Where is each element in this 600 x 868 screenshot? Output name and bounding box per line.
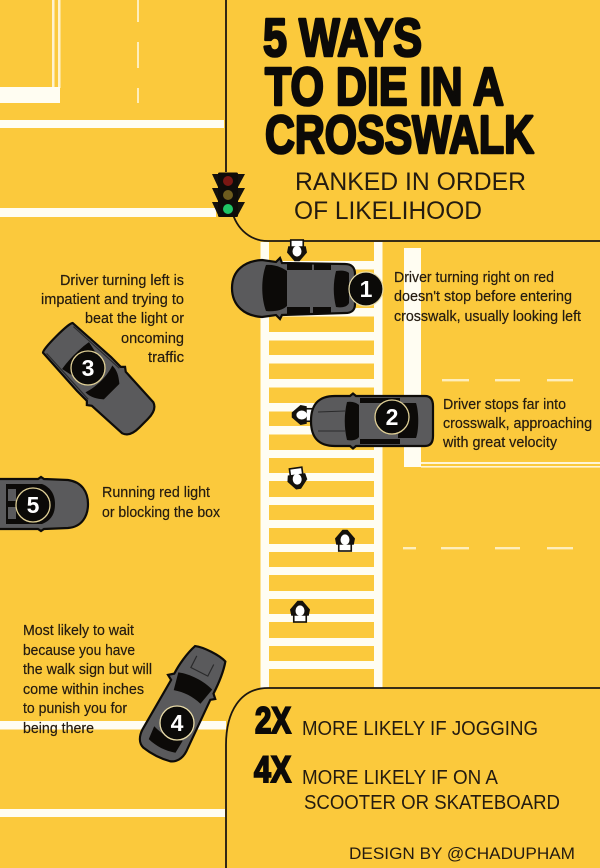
pedestrian 5 bbox=[290, 601, 310, 622]
text: reason 4: come within inches bbox=[23, 681, 144, 698]
stat: 4X scooter or skateboard: MORE LIKELY IF ON A bbox=[302, 767, 499, 789]
pedestrian 3 bbox=[286, 467, 308, 491]
number badge 2: 2 bbox=[386, 404, 398, 430]
text: reason 5: or blocking the box bbox=[102, 504, 220, 521]
number badge 3: 3 bbox=[82, 355, 94, 381]
bottom panel outline bbox=[226, 688, 600, 868]
stat: 2X jogging: MORE LIKELY IF JOGGING bbox=[302, 718, 538, 740]
crosswalk bbox=[260, 242, 382, 688]
number badge 1: 1 bbox=[360, 276, 373, 302]
text: reason 3: impatient and trying to bbox=[41, 291, 184, 308]
top panel outline bbox=[226, 0, 600, 241]
icon: traffic light bbox=[212, 172, 245, 217]
pedestrian 4 bbox=[335, 530, 355, 551]
text: reason 2: with great velocity bbox=[442, 434, 557, 451]
text: reason 4: because you have bbox=[23, 642, 135, 659]
stat: 4X scooter or skateboard: SCOOTER OR SKATEBOARD bbox=[304, 792, 560, 814]
number badge 2 bbox=[375, 400, 409, 434]
car 3 bbox=[37, 317, 163, 443]
text: reason 3: oncoming bbox=[121, 330, 184, 347]
text: reason 4 bbox=[23, 622, 152, 737]
text: reason 2: Driver stops far into bbox=[443, 396, 566, 413]
text: reason 2 bbox=[442, 396, 592, 451]
subtitle bbox=[294, 168, 526, 225]
number badge 1 bbox=[349, 272, 383, 306]
number badge 3 bbox=[71, 351, 105, 385]
text: reason 3 bbox=[41, 272, 184, 366]
subtitle: OF LIKELIHOOD bbox=[294, 197, 482, 225]
text: reason 1: doesn't stop before entering bbox=[394, 288, 572, 305]
subtitle: RANKED IN ORDER bbox=[295, 168, 526, 196]
text: reason 4: Most likely to wait bbox=[23, 622, 135, 639]
car 5 bbox=[0, 477, 88, 531]
stat: 4X scooter or skateboard: 4X bbox=[254, 749, 291, 790]
text: reason 1: crosswalk, usually looking left bbox=[394, 308, 582, 325]
number badge 5 bbox=[16, 488, 50, 522]
title: TO DIE IN A bbox=[265, 57, 504, 117]
car 4 bbox=[133, 639, 234, 768]
title: 5 WAYS bbox=[263, 8, 422, 68]
text: reason 4: to punish you for bbox=[23, 700, 127, 717]
number badge 4: 4 bbox=[171, 710, 184, 736]
car 2 bbox=[311, 394, 433, 448]
text: reason 3: beat the light or bbox=[85, 310, 184, 327]
text: reason 5 bbox=[102, 484, 220, 521]
text: reason 4: the walk sign but will bbox=[23, 661, 152, 678]
stat: 2X jogging bbox=[255, 700, 538, 741]
text: reason 3: traffic bbox=[148, 349, 184, 366]
car 1 bbox=[232, 258, 355, 319]
number badge 4 bbox=[160, 706, 194, 740]
text: reason 1: Driver turning right on red bbox=[394, 269, 554, 286]
text: reason 5: Running red light bbox=[102, 484, 211, 501]
number badge 5: 5 bbox=[27, 492, 40, 518]
text: reason 4: being there bbox=[23, 720, 94, 737]
title bbox=[263, 8, 534, 165]
text: reason 3: Driver turning left is bbox=[60, 272, 184, 289]
pedestrian 2 bbox=[292, 405, 313, 425]
stat: 2X jogging: 2X bbox=[255, 700, 291, 741]
stat: 4X scooter or skateboard bbox=[254, 749, 560, 814]
text: reason 1 bbox=[394, 269, 582, 325]
credit: DESIGN BY @CHADUPHAM bbox=[349, 844, 575, 863]
pedestrian 1 bbox=[287, 240, 307, 261]
text: reason 2: crosswalk, approaching bbox=[443, 415, 592, 432]
